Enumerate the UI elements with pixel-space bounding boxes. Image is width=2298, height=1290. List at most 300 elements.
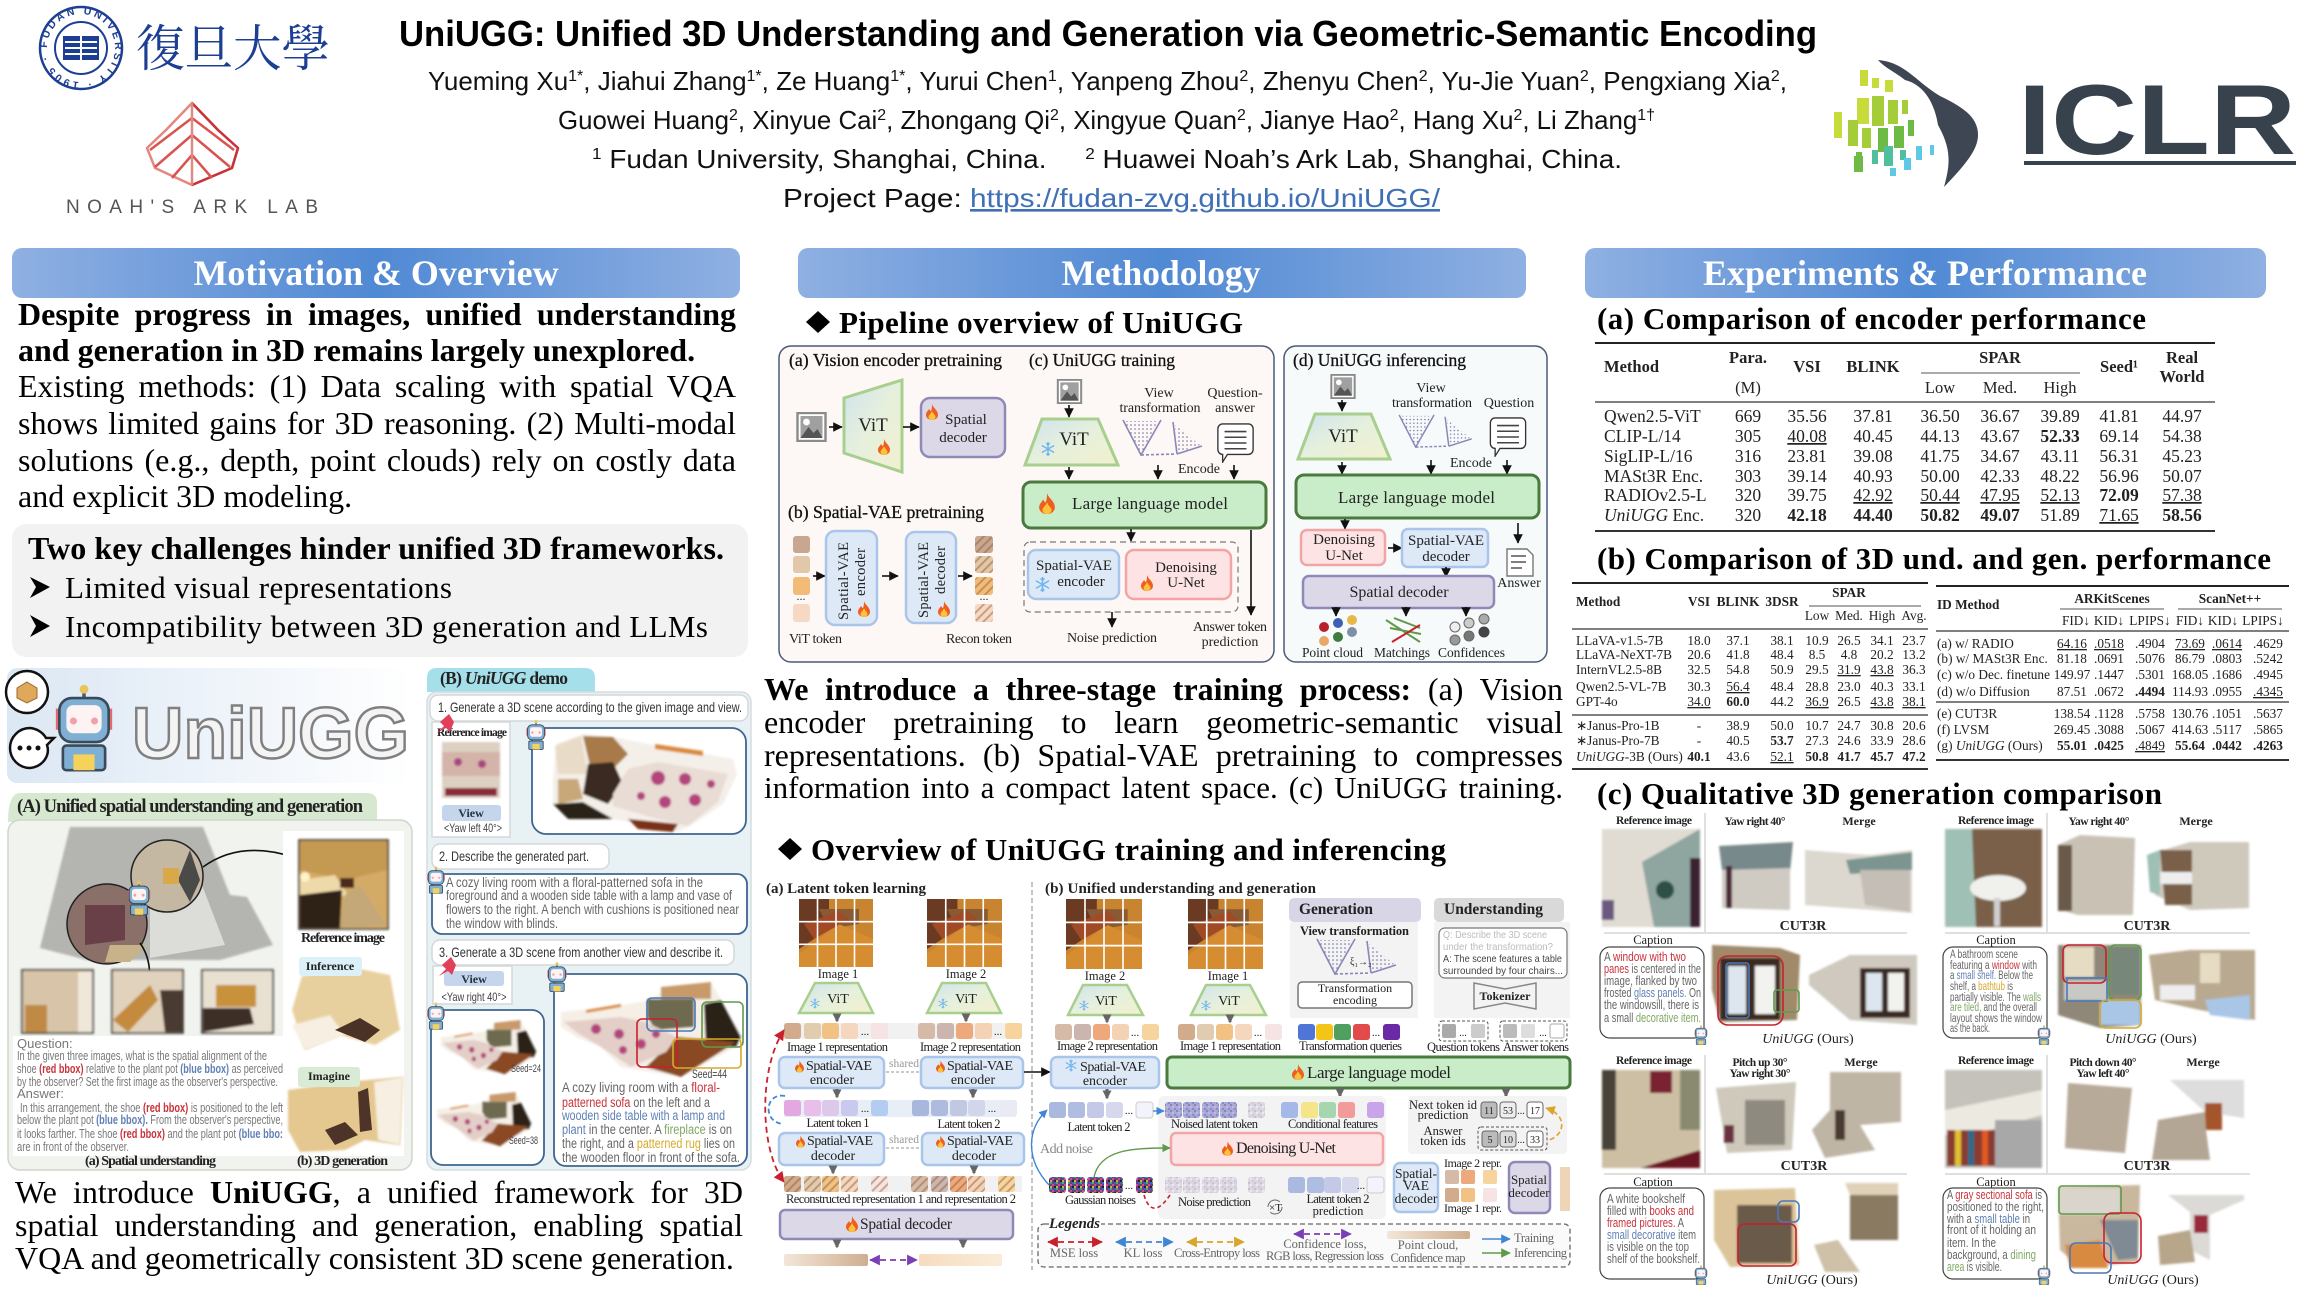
caption box: framed pictures. A <box>1607 1215 1684 1230</box>
rows: 33.9 <box>1870 733 1894 748</box>
rows: 44.2 <box>1770 694 1794 709</box>
(c) diagram: UniUGG training: Question- <box>1207 386 1263 401</box>
reference image label: Reference image <box>301 931 385 946</box>
rows: 40.45 <box>1853 426 1893 446</box>
header row: VSI <box>1793 357 1821 376</box>
reference image <box>1945 1070 2042 1168</box>
text: question and answer <box>17 1036 283 1154</box>
authors line 2: 2 <box>1050 107 1059 124</box>
rows: 53.7 <box>1770 733 1794 748</box>
output decoder chain: Spatial- <box>1395 1166 1437 1181</box>
rows: 52.1 <box>1770 749 1794 764</box>
(b) diagram: spatial-VAE: decoder <box>933 546 949 594</box>
(c) diagram: UniUGG training <box>1023 380 1267 650</box>
header row: SPAR <box>1979 348 2022 367</box>
next token prediction panel <box>1408 1096 1567 1154</box>
image patches <box>1066 899 1263 983</box>
text block: motivation paragraph <box>18 296 736 514</box>
caption box: frosted glass panels. On <box>1604 985 1701 1000</box>
latent tokens <box>769 1096 1017 1131</box>
panel: qualitative example 4 <box>1943 1055 2250 1288</box>
caption box: the windowsill, there is <box>1604 997 1699 1012</box>
header: SPAR <box>1832 585 1866 600</box>
rows: 56.96 <box>2099 466 2139 486</box>
rows: 30.3 <box>1687 679 1711 694</box>
step 1 reference card: View <box>458 806 484 820</box>
step 2 prompt <box>432 844 609 869</box>
icon: thought bubble with cube <box>6 671 48 713</box>
(c) diagram: UniUGG training: transformation <box>1120 401 1200 416</box>
denoising panel <box>1158 1096 1386 1219</box>
legend: MSE loss <box>1048 1242 1102 1260</box>
rows: (f) LVSM <box>1937 722 1990 737</box>
caption label: Caption <box>1633 1175 1674 1189</box>
project page link: Project Page: https://fudan-zvg.github.io/UniUGG/ <box>783 183 1441 213</box>
inference tag: Inference <box>306 959 355 973</box>
understanding branch: Answer tokens <box>1503 1040 1569 1054</box>
reconstructed tokens <box>784 1176 1022 1206</box>
header <box>1576 585 1927 623</box>
legend: point cloud bar: Point cloud, <box>1398 1238 1458 1252</box>
caption box: shelf, a bathtub is <box>1950 981 2013 993</box>
rows: 64.16 <box>2057 636 2087 651</box>
output decoder chain: decoder <box>1395 1191 1438 1206</box>
encoder stack: transformation <box>1392 396 1472 411</box>
authors line 1: Yueming Xu <box>428 66 568 96</box>
header row <box>1604 348 2204 397</box>
rows: (d) w/o Diffusion <box>1937 684 2030 699</box>
(c) diagram: UniUGG training: ViT <box>1059 429 1089 450</box>
representation tokens: ... <box>861 1026 869 1038</box>
authors line 1: 1 <box>1048 68 1057 85</box>
encoder stack: Encode <box>1450 456 1492 471</box>
understanding branch: ... <box>1459 1028 1467 1039</box>
understanding branch: A: The scene features a table <box>1443 953 1562 965</box>
icon: pin <box>437 714 454 733</box>
next token prediction panel: ... <box>1517 1106 1525 1117</box>
seed samples <box>431 1010 544 1165</box>
authors line 1: , <box>1780 66 1787 96</box>
rows: 87.51 <box>2057 684 2087 699</box>
representation tokens: Image 1 representation <box>1180 1039 1282 1053</box>
(c) diagram: UniUGG training: View <box>1144 386 1175 401</box>
imagine tag: Imagine <box>308 1069 351 1083</box>
authors line 2: , Zhongang Qi <box>886 105 1050 135</box>
generation branch: View transformation <box>1300 924 1409 938</box>
spatial-VAE encoder (frozen) <box>1051 1057 1159 1098</box>
text block: motivation paragraph: Existing methods: (1) Data scaling with spatial VQA <box>18 368 736 404</box>
step 3 prompt: 3. Generate a 3D scene from another view and describe it. <box>439 944 723 960</box>
authors line 2: 2 <box>1237 107 1246 124</box>
header: LPIPS↓ <box>2129 613 2171 628</box>
text block: three-stage training: encoder pretraining to learn geometric-semantic visual <box>764 704 1563 740</box>
spatial-VAE decoders: shared <box>889 1134 919 1146</box>
seed 44 scene with description <box>554 974 747 1166</box>
next token prediction panel: prediction <box>1418 1108 1469 1122</box>
authors line 1: , Yurui Chen <box>905 66 1048 96</box>
caption box: front of it holding an <box>1947 1222 2036 1237</box>
prediction labels: Noise prediction <box>1178 1195 1252 1209</box>
rows: 38.1 <box>1902 694 1926 709</box>
legend: confidence and regression losses: RGB loss, Regression loss <box>1266 1249 1384 1263</box>
rows: 56.31 <box>2099 446 2139 466</box>
ViT encoders <box>799 983 1001 1021</box>
column labels: Yaw right 30° <box>1730 1068 1791 1080</box>
authors line 1: 1* <box>568 68 583 85</box>
icon: robot mascot <box>56 685 112 770</box>
caption: spatial understanding: (a) Spatial understanding <box>85 1154 216 1169</box>
understanding branch <box>1427 898 1570 1054</box>
caption box: layout shows the window <box>1950 1013 2042 1025</box>
authors line 2: 2 <box>1513 107 1522 124</box>
seed 44 scene with description: wooden side table with a lamp and <box>561 1108 725 1123</box>
rows: 320 <box>1735 485 1761 505</box>
caption label: Caption <box>1976 933 2017 947</box>
representation tokens <box>784 1023 1022 1054</box>
denoising U-Net: Denoising U-Net <box>1236 1140 1337 1157</box>
legend <box>1038 1214 1570 1267</box>
caption box: panes is centered in the <box>1604 961 1701 976</box>
rows: .4629 <box>2253 636 2283 651</box>
rows: 10.9 <box>1805 633 1829 648</box>
rows: 50.00 <box>1920 466 1960 486</box>
latent tokens: Latent token 2 <box>938 1117 1000 1131</box>
spatial-VAE decoders: Spatial-VAE <box>947 1134 1013 1149</box>
rows: 40.93 <box>1853 466 1893 486</box>
ViT encoders <box>1068 985 1266 1022</box>
point map outputs <box>784 1254 1002 1266</box>
representation tokens: ... <box>1131 1027 1139 1039</box>
rows: 50.82 <box>1920 505 1960 525</box>
icon: robot <box>2038 1265 2050 1285</box>
token labels: Noised latent token <box>1171 1117 1259 1131</box>
rows: 54.8 <box>1726 662 1750 677</box>
(b) diagram: spatial-VAE: ... <box>796 589 806 603</box>
text block: three-stage training <box>764 671 1563 805</box>
photo row <box>22 970 273 1033</box>
rows: 48.22 <box>2040 466 2080 486</box>
authors line 2: , Jianye Hao <box>1246 105 1390 135</box>
logo: Fudan calligraphy: 復旦大學 <box>136 9 330 81</box>
rows: 269.45 <box>2054 722 2091 737</box>
column labels: Reference image <box>1616 1055 1692 1067</box>
understanding branch: Q: Describe the 3D scene <box>1443 929 1547 941</box>
step 3 prompt <box>432 940 734 965</box>
rows: 23.7 <box>1902 633 1926 648</box>
Gaussian noises: Gaussian noises <box>1065 1193 1136 1207</box>
representation tokens: Image 1 representation <box>787 1040 889 1054</box>
rows: 8.5 <box>1809 647 1826 662</box>
next token prediction panel: Answer <box>1424 1124 1463 1138</box>
header: High <box>1869 608 1896 623</box>
latent token 2: Latent token 2 <box>1068 1120 1130 1134</box>
bullet 1: Limited visual representations <box>65 570 452 605</box>
authors line 1: , Yu-Jie Yuan <box>1428 66 1580 96</box>
caption box: A white bookshelf <box>1607 1191 1685 1206</box>
representation tokens <box>1055 1024 1282 1053</box>
generation branch: encoding <box>1333 993 1377 1007</box>
(c) diagram: UniUGG training: U-Net <box>1167 575 1206 591</box>
caption box: image, flanked by two <box>1604 973 1697 988</box>
caption box: A bathroom scene <box>1950 949 2018 961</box>
rows: 52.13 <box>2040 485 2080 505</box>
ViT encoders: ViT <box>955 992 977 1007</box>
prediction labels <box>1178 1192 1370 1218</box>
next token prediction panel: 53 <box>1503 1106 1513 1117</box>
rows: LLaVA-v1.5-7B <box>1576 633 1663 648</box>
rows: 42.33 <box>1980 466 2020 486</box>
icon: robot <box>1695 1025 1707 1045</box>
rows: 43.8 <box>1870 694 1894 709</box>
rows: .5067 <box>2135 722 2165 737</box>
header: logos and title block <box>38 6 2296 218</box>
rows: 39.14 <box>1787 466 1827 486</box>
header row: High <box>2044 378 2077 397</box>
rows: .0803 <box>2212 651 2242 666</box>
column labels <box>1616 814 1876 828</box>
rows: 414.63 <box>2172 722 2209 737</box>
authors line 2: 1† <box>1637 107 1655 124</box>
header row: Low <box>1925 378 1955 397</box>
inference bed detail <box>335 1018 380 1042</box>
spatial-VAE decoders: Spatial-VAE <box>807 1134 873 1149</box>
representation tokens: Image 2 representation <box>1057 1039 1159 1053</box>
rows: 47.2 <box>1902 749 1926 764</box>
rows: 28.8 <box>1805 679 1829 694</box>
rows: InternVL2.5-8B <box>1576 662 1662 677</box>
rows: 18.0 <box>1687 633 1711 648</box>
understanding branch: Question tokens <box>1427 1040 1500 1054</box>
CUT3R label: CUT3R <box>2124 919 2171 934</box>
rows: 48.4 <box>1770 679 1794 694</box>
step 2 description <box>432 874 747 934</box>
denoising U-Net <box>1171 1133 1383 1165</box>
icon: robot <box>526 720 546 749</box>
text: question and answer: In this arrangement, the shoe (red bbox) is positioned to the left <box>20 1100 283 1115</box>
rows: .4945 <box>2253 667 2283 682</box>
caption box: background, a dining <box>1947 1247 2036 1262</box>
caption box <box>1943 947 2047 1038</box>
UniUGG label: UniUGG (Ours) <box>2105 1032 2197 1047</box>
outputs: point cloud, matchings, confidences <box>1302 614 1505 660</box>
rows: 35.56 <box>1787 406 1827 426</box>
MSE loss arc <box>765 1030 784 1182</box>
rows: .0955 <box>2212 684 2242 699</box>
step 1 reference card: Reference image <box>437 727 507 739</box>
header row: Real <box>2166 348 2198 367</box>
CUT3R views <box>2058 835 2249 915</box>
latent prediction tokens <box>1288 1177 1384 1193</box>
legend: KL loss: KL loss <box>1124 1246 1163 1260</box>
rows: 320 <box>1735 505 1761 525</box>
large language model: Large language model <box>1338 488 1495 507</box>
spatial-VAE decoders: decoder <box>952 1149 996 1164</box>
imagine wall highlight <box>374 1077 403 1145</box>
seed 44 scene with description: the right, and a patterned rug lies on <box>562 1136 735 1151</box>
chart: unified understanding and generation <box>1031 881 1570 1267</box>
rows: Qwen2.5-ViT <box>1604 406 1701 426</box>
caption box: a small decorative item. <box>1604 1010 1701 1025</box>
affiliations: Huawei Noah’s Ark Lab, Shanghai, China. <box>1095 144 1622 174</box>
step 1 prompt: 1. Generate a 3D scene according to the given image and view. <box>438 699 742 715</box>
text: question and answer: are in front of the observer. <box>17 1139 129 1154</box>
authors line 1: 1* <box>890 68 905 85</box>
output decoder chain: Image 2 repr. <box>1444 1156 1502 1170</box>
caption box: small decorative item <box>1607 1227 1696 1242</box>
rows: 28.6 <box>1902 733 1926 748</box>
header: Med. <box>1835 608 1863 623</box>
caption box: are tiled, and the overall <box>1950 1002 2037 1014</box>
rows: 55.64 <box>2175 738 2205 753</box>
header: ARKitScenes <box>2074 591 2150 606</box>
authors line 1: 2 <box>1419 68 1428 85</box>
logo: Fudan University seal: FUDAN UNIVERSITY · 1905 · <box>41 8 121 88</box>
rows: .0518 <box>2094 636 2124 651</box>
rows: 37.81 <box>1853 406 1893 426</box>
spatial-VAE decoders <box>779 1133 1024 1173</box>
rows: .5865 <box>2253 722 2283 737</box>
rows: .5117 <box>2212 722 2242 737</box>
panel heading: Motivation & Overview: Motivation & Overview <box>194 253 559 293</box>
rows: 38.9 <box>1726 718 1750 733</box>
ViT encoders: ViT <box>827 992 849 1007</box>
rows: 305 <box>1735 426 1761 446</box>
rows: 26.5 <box>1837 694 1861 709</box>
understanding branch: under the transformation? <box>1443 941 1553 953</box>
rows: 40.3 <box>1870 679 1894 694</box>
rows: 57.38 <box>2162 485 2202 505</box>
legend: KL loss <box>1116 1242 1173 1260</box>
rows: SigLIP-L/16 <box>1604 446 1693 466</box>
text: question and answer: Answer: <box>17 1086 64 1101</box>
(b) diagram: spatial-VAE: Recon token <box>946 632 1012 647</box>
next token prediction panel: 10 <box>1503 1135 1513 1146</box>
step 2 description: flowers to the right. A bench with cushions is positioned near <box>446 902 739 917</box>
decoders: U-Net <box>1325 548 1364 564</box>
large language model <box>1296 475 1539 518</box>
caption box <box>1600 947 1704 1038</box>
panel: two key challenges <box>12 524 748 657</box>
header row: Method <box>1604 357 1659 376</box>
rows: 81.18 <box>2057 651 2087 666</box>
rows: 49.07 <box>1980 505 2020 525</box>
seed samples: Seed=24 <box>511 1063 541 1075</box>
authors line 2: , Xinyue Cai <box>738 105 877 135</box>
caption box: partially visible. The walls <box>1950 992 2041 1004</box>
panel heading: Experiments & Performance <box>1585 248 2266 298</box>
spatial decoder: Spatial decoder <box>860 1216 953 1233</box>
reconstructed tokens: Reconstructed representation 1 and representation 2 <box>786 1192 1016 1206</box>
rows: 37.1 <box>1726 633 1750 648</box>
UniUGG views <box>1714 1183 1898 1272</box>
bullet marker 1 <box>30 577 50 598</box>
rows: 38.1 <box>1770 633 1794 648</box>
bullet 2: Incompatibility between 3D generation and LLMs <box>65 609 708 644</box>
header row: Para. <box>1729 348 1767 367</box>
caption box: is visible on the top <box>1607 1239 1689 1254</box>
imagine room detail <box>325 1088 372 1145</box>
rows: LLaVA-NeXT-7B <box>1576 647 1672 662</box>
authors line 1: 1* <box>747 68 762 85</box>
CUT3R views <box>1716 1072 1901 1158</box>
rows: 20.2 <box>1870 647 1894 662</box>
legend: MSE loss: MSE loss <box>1050 1246 1098 1260</box>
(b) heading: (b) Spatial-VAE pretraining <box>788 502 984 522</box>
UniUGG views <box>1712 945 1917 1025</box>
text: question and answer: by the observer? Set the first image as the observer's perspective. <box>17 1074 278 1089</box>
rows: (g) UniUGG (Ours) <box>1937 738 2043 753</box>
authors line 2: 2 <box>729 107 738 124</box>
inference tag <box>299 957 362 976</box>
seed samples: Seed=38 <box>509 1135 538 1147</box>
icon: robot <box>1695 1265 1707 1285</box>
(a) diagram: ViT to spatial decoder <box>798 380 1005 472</box>
right column: 3D generation <box>283 831 404 1156</box>
rows: Qwen2.5-VL-7B <box>1576 679 1667 694</box>
step 1 prompt <box>430 695 748 721</box>
logo text: Noah's Ark Lab: NOAH'S ARK LAB <box>66 197 320 218</box>
(c) diagram: UniUGG training: Noise prediction <box>1067 631 1157 646</box>
spatial-VAE encoders: Spatial-VAE <box>947 1059 1013 1074</box>
rows: 138.54 <box>2054 706 2091 721</box>
(b) diagram: spatial-VAE: ViT token <box>789 632 842 647</box>
challenges heading: Two key challenges hinder unified 3D frameworks. <box>28 530 724 566</box>
rows: .5242 <box>2253 651 2283 666</box>
rows: 41.8 <box>1726 647 1750 662</box>
column labels <box>1958 814 2213 828</box>
rows: .1051 <box>2212 706 2242 721</box>
image patches <box>799 899 1002 981</box>
caption box: featuring a window with <box>1950 960 2037 972</box>
(b) diagram: spatial-VAE <box>789 531 1012 647</box>
(b) diagram: spatial-VAE: ... <box>980 589 988 603</box>
heading: (b) 3D performance comparison: (b) Comparison of 3D und. and gen. performance <box>1597 541 2271 576</box>
rows: 316 <box>1735 446 1761 466</box>
latent tokens: Latent token 1 <box>806 1116 870 1130</box>
rows: 4.8 <box>1841 647 1858 662</box>
authors line 1: 2 <box>1239 68 1248 85</box>
large language model <box>1167 1057 1570 1096</box>
outputs: point cloud, matchings, confidences: Point cloud <box>1302 645 1363 660</box>
rows: .4849 <box>2135 738 2165 753</box>
representation tokens: ... <box>1254 1027 1262 1039</box>
rows: (b) w/ MASt3R Enc. <box>1937 651 2048 666</box>
rows: 44.40 <box>1853 505 1893 525</box>
rows: (e) CUT3R <box>1937 706 1997 721</box>
panel: (A) Unified spatial understanding and generation <box>8 793 412 1170</box>
generation branch: Transformation <box>1318 981 1392 995</box>
caption box: item. In the <box>1947 1235 1996 1250</box>
rows: 24.7 <box>1837 718 1861 733</box>
UniUGG views <box>2058 945 2255 1028</box>
output decoder chain <box>1394 1156 1570 1215</box>
rows: .5758 <box>2135 706 2165 721</box>
rows: 26.5 <box>1837 633 1861 648</box>
rows: 130.76 <box>2172 706 2209 721</box>
logo: Noah's Ark Lab leaf <box>147 103 238 185</box>
panel: qualitative example 3 <box>1600 1055 1907 1288</box>
authors line 2: Guowei Huang <box>558 105 730 135</box>
legend: point cloud bar: Confidence map <box>1390 1251 1466 1265</box>
spatial-VAE encoders: shared <box>889 1058 919 1070</box>
rows: 60.0 <box>1726 694 1750 709</box>
rows: 40.08 <box>1787 426 1827 446</box>
header: KID↓ <box>2094 613 2124 628</box>
image patches: Image 2 <box>1085 969 1125 983</box>
Gaussian noises: ... <box>1125 1180 1133 1192</box>
banner: UniUGG logo <box>6 668 412 783</box>
rows: 23.0 <box>1837 679 1861 694</box>
